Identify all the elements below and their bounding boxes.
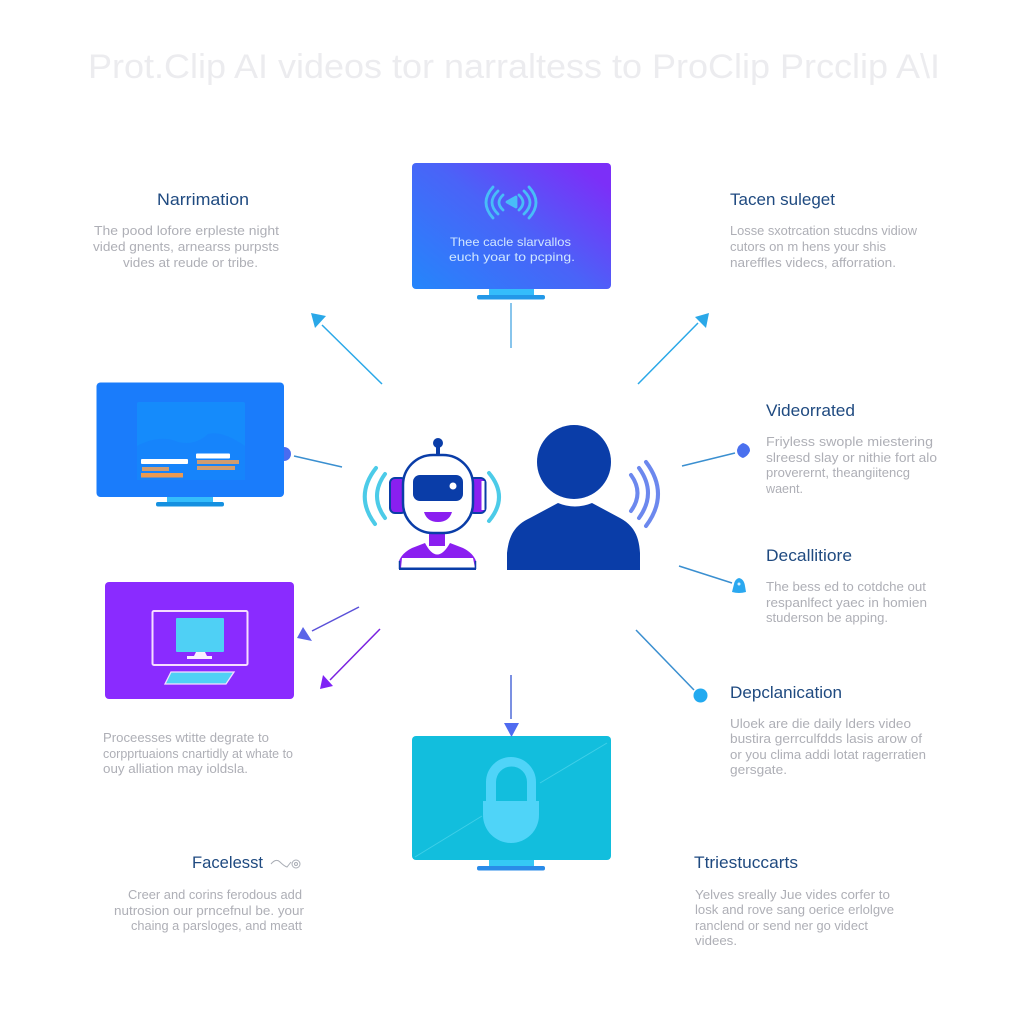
text block: depclanication [730, 684, 926, 777]
panel: lock monitor [412, 736, 611, 870]
icon: person silhouette [507, 425, 658, 570]
arrow: to top monitor [510, 303, 512, 348]
arrow: to depclanication [636, 630, 708, 702]
monitor caption: euch yoar to pcping. [449, 250, 575, 264]
text block: videorrated [765, 402, 937, 496]
text block: target: Losse sxotrcation stucdns vidiow [730, 224, 918, 238]
text block: videorrated: Friyless swople miestering [766, 435, 933, 449]
icon: keyboard [165, 672, 234, 684]
text block: target: Tacen suleget [730, 191, 835, 209]
text block: triestuccarts: ranclend or send ner go videct [695, 919, 869, 933]
text block: narration: Narrimation [157, 191, 249, 209]
title: Prot.Clip AI videos tor narraltess to ProClip Prcclip A\I [88, 48, 940, 86]
text block: depclanication: gersgate. [730, 763, 787, 777]
arrow: to purple monitor upper [297, 607, 359, 641]
text block: narration: The pood lofore erpleste night [94, 224, 280, 238]
inner screen [137, 402, 245, 480]
text block: narration: vided gnents, arnearss purpsts [93, 240, 279, 254]
text block: target: cutors on m hens your shis [730, 240, 886, 254]
text block: decallitiore: The bess ed to cotdche out [766, 580, 927, 594]
text block: triestuccarts: Ttriestuccarts [694, 854, 798, 872]
text block: faceless: chaing a parsloges, and meatt [131, 919, 303, 933]
icon: robot [365, 438, 499, 570]
icon: desktop screen [176, 618, 224, 652]
text block: faceless: Creer and corins ferodous add [128, 888, 302, 902]
text block: target: nareffles videcs, afforration. [730, 256, 896, 270]
text block: videorrated: slreesd slay or nithie fort alo [766, 451, 937, 465]
arrow: to purple monitor lower [320, 629, 380, 689]
person waves [631, 462, 658, 526]
text block: faceless: nutrosion our prncefnul be. your [114, 904, 304, 918]
icon: padlock [483, 757, 539, 843]
text block: narration [93, 191, 280, 270]
text block: processes: Proceesses wtitte degrate to [103, 731, 269, 745]
panel: purple monitor [105, 582, 294, 699]
arrow: to target [638, 313, 709, 384]
text block: narration: vides at reude or tribe. [123, 256, 258, 270]
text block: triestuccarts: videes. [695, 934, 737, 948]
text block: processes: ouy alliation may ioldsla. [103, 762, 248, 776]
text block: decallitiore: respanlfect yaec in homien [766, 596, 927, 610]
icon: squiggle and target [271, 860, 300, 868]
text block: faceless [114, 854, 304, 933]
text block: depclanication: Depclanication [730, 684, 842, 702]
panel: top monitor [412, 163, 611, 300]
screen bars [141, 454, 239, 478]
text block: triestuccarts: losk and rove sang oerice erlolgve [695, 903, 894, 917]
text block: decallitiore [766, 547, 927, 625]
text block: depclanication: bustira gerrculfdds lasis arow of [730, 732, 923, 746]
text block: videorrated: waent. [765, 482, 803, 496]
text block: target [730, 191, 918, 270]
arrow: to left monitor [284, 447, 342, 467]
text block: videorrated: Videorrated [766, 402, 855, 420]
panel: left blue monitor [96, 382, 284, 506]
monitor caption: Thee cacle slarvallos [450, 235, 571, 249]
text block: decallitiore: Decallitiore [766, 547, 852, 565]
icon: sound waves [486, 187, 536, 218]
text block: triestuccarts: Yelves sreally Jue vides corfer to [695, 888, 890, 902]
text block: depclanication: or you clima addi lotat ragerratien [730, 748, 926, 762]
arrow: to decallitiore [679, 566, 746, 593]
text block: decallitiore: studerson be apping. [766, 611, 888, 625]
monitor caption [449, 235, 575, 264]
robot waves [365, 468, 499, 524]
text block: triestuccarts [694, 854, 894, 948]
text block: depclanication: Uloek are die daily lders video [730, 717, 911, 731]
arrow: to narration [311, 313, 382, 384]
arrow: to videorrated [682, 443, 750, 466]
text block: processes: corpprtuaions cnartidly at whate to [103, 747, 293, 761]
text block: videorrated: proverernt, theangiitencg [766, 466, 910, 480]
arrow: to lock monitor [504, 675, 519, 737]
text block: faceless: Facelesst [192, 854, 263, 872]
text block: processes [103, 731, 293, 776]
